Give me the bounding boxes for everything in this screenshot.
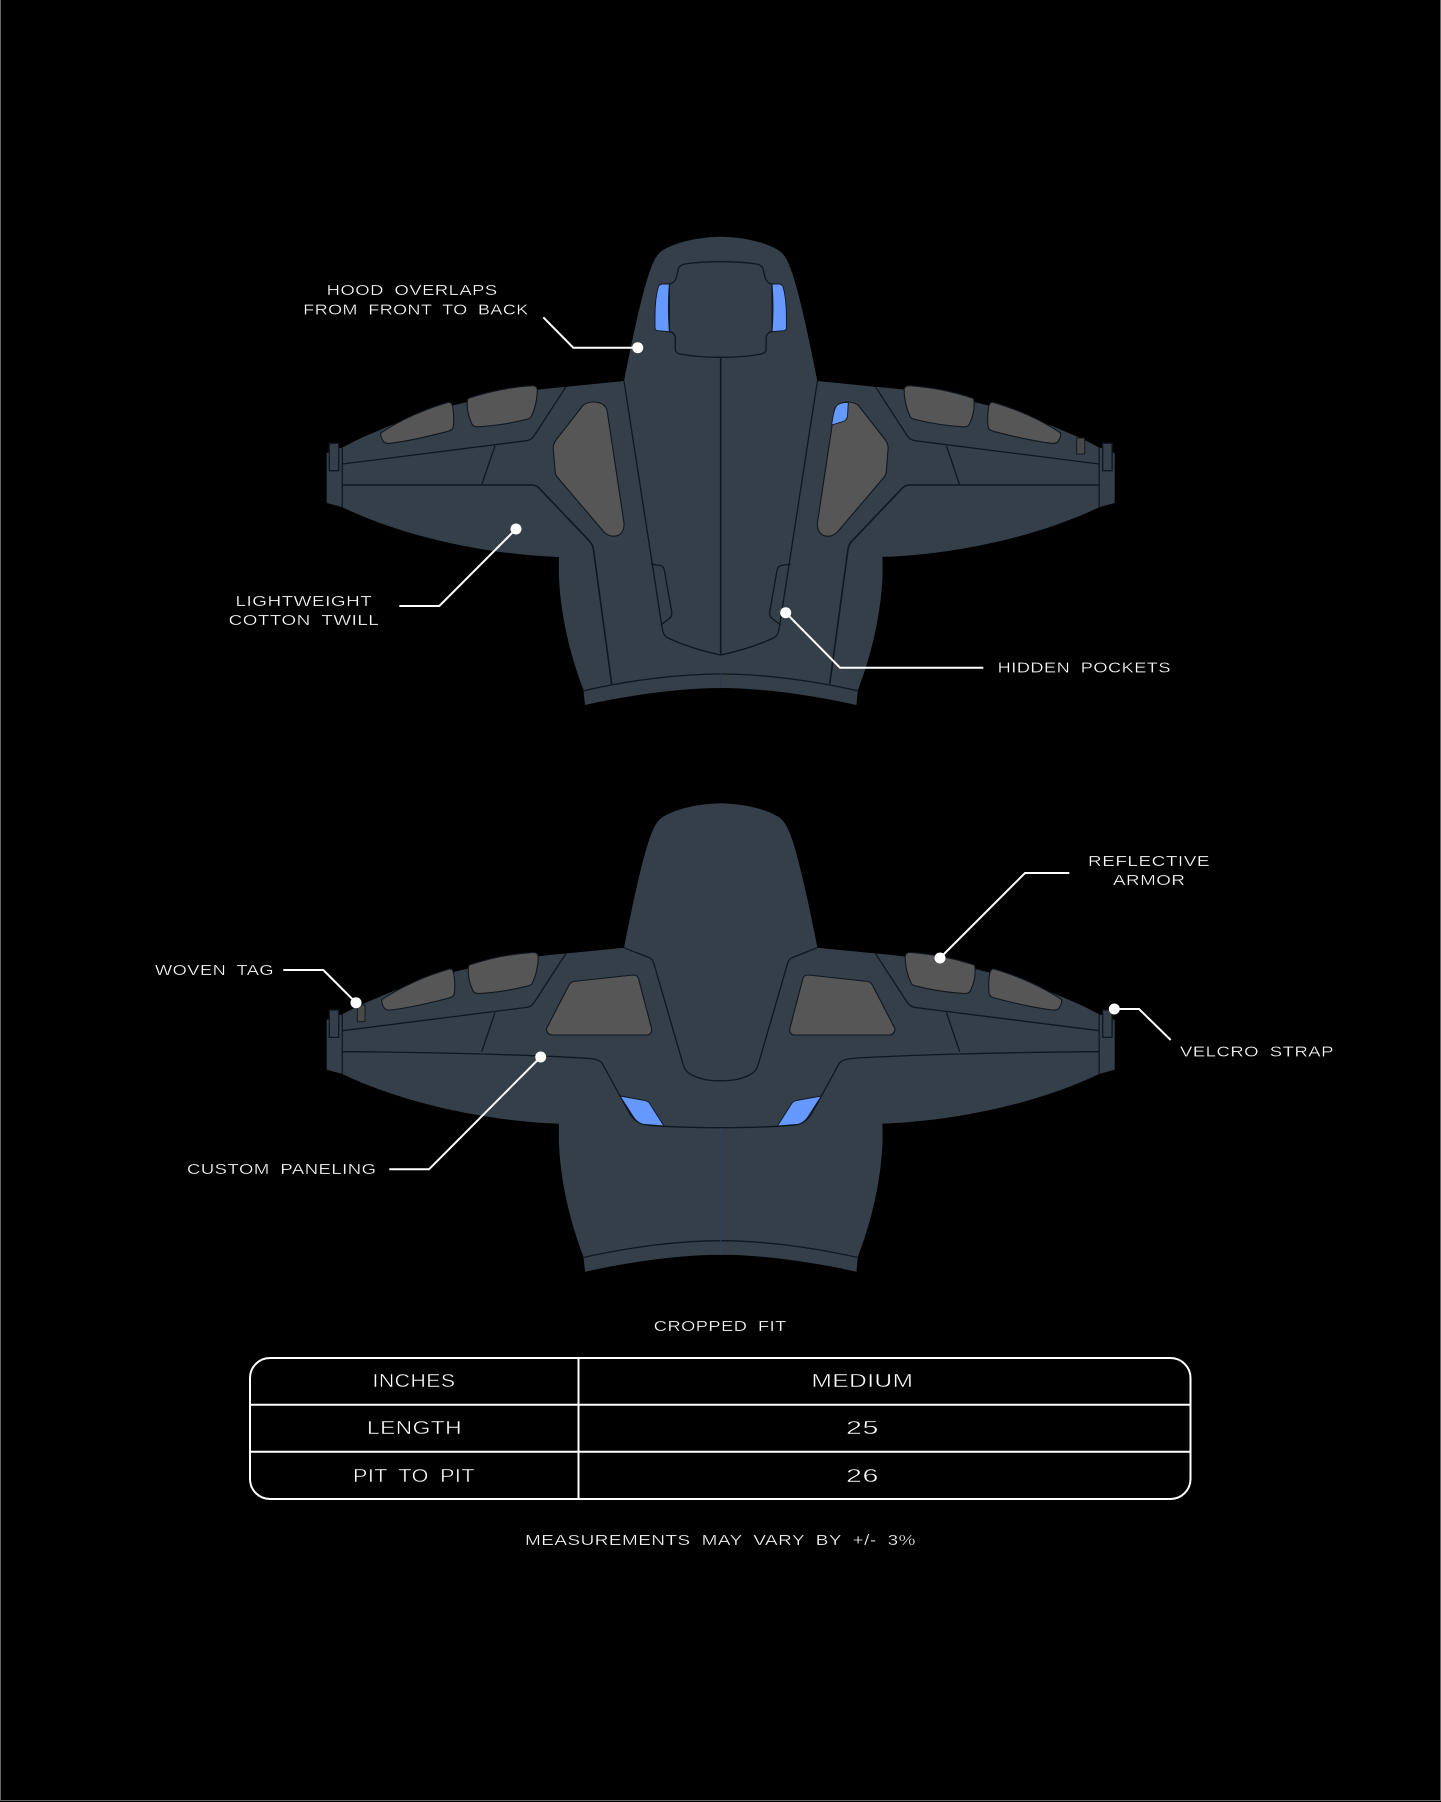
blue pocket tab: [832, 402, 848, 425]
back sleeves with reflective armor patches: [329, 952, 1112, 1074]
callout: custom paneling: [187, 1052, 546, 1178]
table row: header: INCHES: [372, 1371, 456, 1391]
callout: lightweight cotton twill: [229, 524, 521, 629]
callout: hidden pockets: [780, 607, 1171, 677]
size table: [250, 1358, 1190, 1499]
callout: reflective armor: ARMOR: [1113, 873, 1186, 889]
back armor panels: [546, 975, 895, 1035]
table row: length: [367, 1418, 879, 1438]
front panels and seams: [342, 357, 1099, 691]
callout: woven tag: WOVEN TAG: [155, 963, 274, 979]
callout: hood overlaps: HOOD OVERLAPS: [327, 283, 498, 299]
callout: hood overlaps: [303, 283, 643, 353]
back jacket body silhouette: [327, 803, 1115, 1272]
callout: lightweight cotton twill: COTTON TWILL: [229, 613, 379, 629]
callout: lightweight cotton twill: LIGHTWEIGHT: [236, 594, 372, 610]
table row: pit to pit: 26: [846, 1466, 879, 1486]
chest armor panels: [553, 402, 888, 536]
front jacket body silhouette: [327, 237, 1115, 705]
table row: length: 25: [846, 1418, 879, 1438]
woven tag front: [1077, 438, 1085, 454]
jacket: back view: [327, 803, 1115, 1272]
callout: velcro strap: VELCRO STRAP: [1180, 1045, 1334, 1061]
table row: length: LENGTH: [367, 1418, 462, 1438]
callout: custom paneling: CUSTOM PANELING: [187, 1162, 376, 1178]
callout: reflective armor: REFLECTIVE: [1088, 854, 1210, 870]
table row: header: [372, 1371, 914, 1391]
callout: velcro strap: [1109, 1004, 1334, 1061]
callout: woven tag: [155, 963, 362, 1008]
footnote: measurement tolerance: MEASUREMENTS MAY VARY BY +/- 3%: [525, 1533, 916, 1549]
jacket: front view: [327, 237, 1115, 705]
callout: reflective armor: [934, 854, 1210, 964]
yoke and lower seams: [342, 948, 1099, 1257]
hood opening: [669, 262, 772, 357]
callout: hood overlaps: FROM FRONT TO BACK: [303, 302, 529, 318]
table row: pit to pit: [353, 1466, 879, 1486]
sleeves with reflective armor patches: [329, 386, 1112, 507]
table row: pit to pit: PIT TO PIT: [353, 1466, 475, 1486]
callout: hidden pockets: HIDDEN POCKETS: [998, 661, 1171, 677]
hood blue reflective inserts: [655, 284, 786, 332]
woven tag back: [357, 1005, 365, 1022]
table row: header: MEDIUM: [812, 1371, 914, 1391]
heading: cropped fit: CROPPED FIT: [654, 1319, 787, 1335]
back blue inserts: [620, 1096, 821, 1126]
